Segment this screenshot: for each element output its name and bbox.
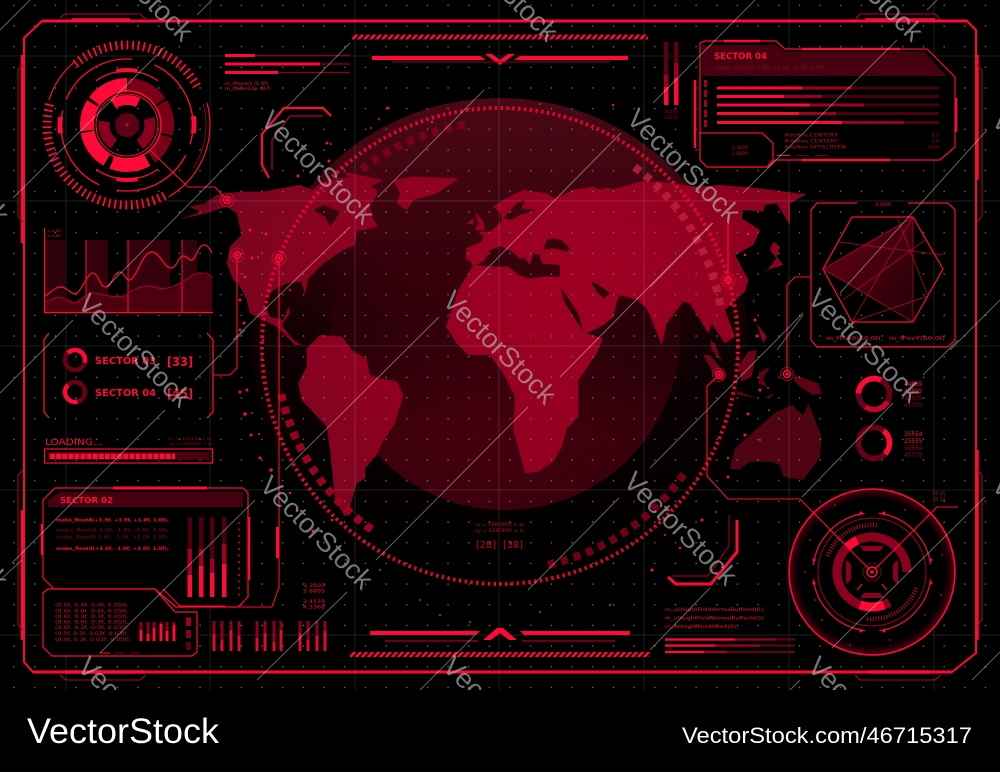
corner bracket upper left of globe [262, 108, 331, 178]
vertical level bars [188, 517, 226, 597]
twin level bars: 35554 [664, 109, 678, 115]
top aspect readout [225, 54, 350, 92]
code rows: (0.6f, 0.6f, 0.3f, 0.05f), [55, 620, 129, 626]
chart shaded bands [45, 240, 212, 312]
continents: Americas, Eurasia, Africa [180, 172, 806, 516]
watermark text: VectorStock [255, 104, 381, 230]
sector status panel: SECTOR 03 [95, 356, 156, 367]
twin level bars [664, 42, 678, 121]
panel: sector 02 [42, 488, 278, 607]
map location nodes [220, 193, 794, 382]
panel: sector 04 [695, 41, 956, 167]
small numeric readout [303, 583, 325, 610]
panel: sector 04: 0.0 [932, 132, 939, 138]
panel: sector 04: 5000 [927, 144, 939, 150]
footer url: VectorStock.com/46715317 [682, 723, 972, 748]
loading bar: LOADING... [45, 438, 103, 448]
donut sector 03 [65, 350, 85, 370]
panel: sector 04: #define CENTERY [784, 138, 838, 144]
right donut charts with values: 35554 [904, 432, 923, 438]
small numeric readout: 3.3500 [303, 583, 325, 589]
radar values [933, 491, 946, 503]
code text [56, 518, 170, 552]
centre coordinates: [38] [503, 540, 523, 551]
right donut charts with values: 46695 [904, 389, 923, 395]
centre coordinates [475, 522, 525, 551]
bottom-right radar scope [789, 489, 955, 655]
horizontal level bars [717, 86, 939, 124]
donut sector 04 [65, 382, 85, 402]
top-left reticle [44, 42, 210, 208]
Australia, New Guinea and Indonesia [703, 340, 822, 480]
panel: sector 04: make_float4(-1.0f, +1.0f, -1.0f, 1.0f), [714, 65, 828, 71]
code rows: (0.0f, 0.4f, 0.0f, 0.05f), [55, 602, 129, 608]
right donut charts with values: 50554 [904, 446, 923, 452]
code text: make_float4(-1.0f, -1.0f, -1.0f, 1.0f), [56, 528, 170, 534]
panel: sector 04: #define OFFSCREEN [784, 144, 846, 150]
panel: hexagon radar chart: m_fFovY(60.0f) [889, 336, 945, 342]
right donut charts with values: 45705 [904, 403, 923, 409]
corner bracket lower right of globe [668, 515, 737, 584]
right donut charts with values [858, 378, 923, 459]
footer band [0, 690, 1000, 772]
code rows: (0.5f, 0.1f, 0.02f, 0.03f), [55, 631, 129, 637]
panel: coordinates table [43, 589, 225, 656]
sector status panel: SECTOR 04 [95, 388, 156, 399]
lower right buffer readout [665, 607, 795, 652]
watermark text: VectorStock [618, 465, 744, 591]
centre coordinates: cx = CENTERX + w; [475, 522, 525, 527]
top aspect readout: m_fAspect (1.0f) [225, 81, 268, 87]
code rows [55, 602, 131, 643]
code text: make_float4(+1.0f, +1.0f, +1.0f, 1.0f), [56, 518, 169, 524]
panel: sector 04: SECTOR 04 [714, 52, 767, 62]
code text: make_float4(+1.0f, -1.0f, +1.0f, 1.0f), [56, 546, 169, 552]
panel: hexagon radar chart [811, 202, 955, 347]
code rows: (0.4f, 0.3f, 0.02f, 0.05f), [55, 637, 131, 643]
centre coordinates: cy = CENTERY + h; [475, 528, 525, 533]
sector status panel: [45] [167, 387, 193, 401]
lower right buffer readout: m_uHeightFieldVertexBufferId(0), [665, 607, 766, 613]
line chart: i=1.0fl. [48, 228, 62, 233]
watermark text: VectorStock [437, 284, 563, 410]
right donut charts with values: 45705 [904, 453, 923, 459]
line chart [44, 228, 213, 312]
loading bar: cy = CENTERY + h; [170, 441, 212, 446]
bottom centre hatched footer [350, 628, 650, 657]
code rows: (0.6f, 0.3f, 0.3f, 0.05f), [55, 614, 129, 620]
connector lines [150, 150, 958, 607]
bottom equaliser bars [214, 621, 325, 651]
loading bar: cx = CENTERX + w; [168, 436, 212, 441]
code text: make_float4(-1.0f, -1.0f, +1.0f, 1.0f), [56, 534, 170, 540]
loading bar [44, 436, 212, 463]
top aspect readout: m_fNearClip (0.f) [225, 86, 271, 92]
radar values: 25.45 [933, 491, 946, 497]
top centre hatched header [352, 34, 648, 65]
footer logo: VectorStock [27, 712, 220, 751]
watermark text: VectorStock [254, 469, 380, 595]
scattered data points [238, 103, 770, 623]
watermark text: VectorStock [72, 287, 198, 413]
right donut charts with values: 32505 [904, 396, 923, 402]
centre coordinates: [28] [476, 540, 496, 551]
right donut charts with values: 25555 [904, 439, 923, 445]
line chart: i=0.0fl. [48, 233, 62, 238]
panel: sector 02: SECTOR 02 [60, 496, 113, 505]
sector status panel: [33] [167, 355, 193, 369]
panel: sector 04: 0.0 [932, 138, 939, 144]
panel: sector 04: #define CENTERX [784, 132, 838, 138]
twin level bars: 25555 [664, 115, 678, 121]
lower right buffer readout: m_uHeightFieldNormalBufferId(0), [665, 616, 766, 622]
donut two [858, 428, 890, 458]
code rows: (0.6f, 0.2f, 0.0f, 0.01f), [55, 625, 129, 631]
panel: hexagon radar chart: m_fFovX(60.0f), [826, 336, 884, 342]
inner readout box: 3.3500 [732, 145, 748, 151]
right donut charts with values: 44885 [904, 382, 923, 388]
lower right buffer readout: m_uHeightFieldSizeX(0), [665, 624, 739, 630]
sector status panel [44, 333, 213, 418]
donut one [858, 378, 890, 410]
watermark text: VectorStock [621, 102, 747, 228]
watermark text: VectorStock [802, 282, 928, 408]
small numeric readout: 4.3368 [303, 604, 325, 610]
inner readout box: 2.0000 [732, 151, 748, 157]
globe dial ring [262, 108, 738, 584]
inner readout box [700, 133, 773, 167]
world map [180, 172, 822, 516]
code rows: (0.6f, 0.6f, 0.6f, 0.05f), [55, 608, 129, 614]
panel: hexagon radar chart: 3.3500 [875, 202, 891, 208]
small numeric readout: 2.8895 [303, 588, 325, 594]
radar values: 45.54 [933, 497, 946, 503]
globe disc [252, 98, 748, 510]
small numeric readout: 3.4578 [303, 599, 325, 605]
